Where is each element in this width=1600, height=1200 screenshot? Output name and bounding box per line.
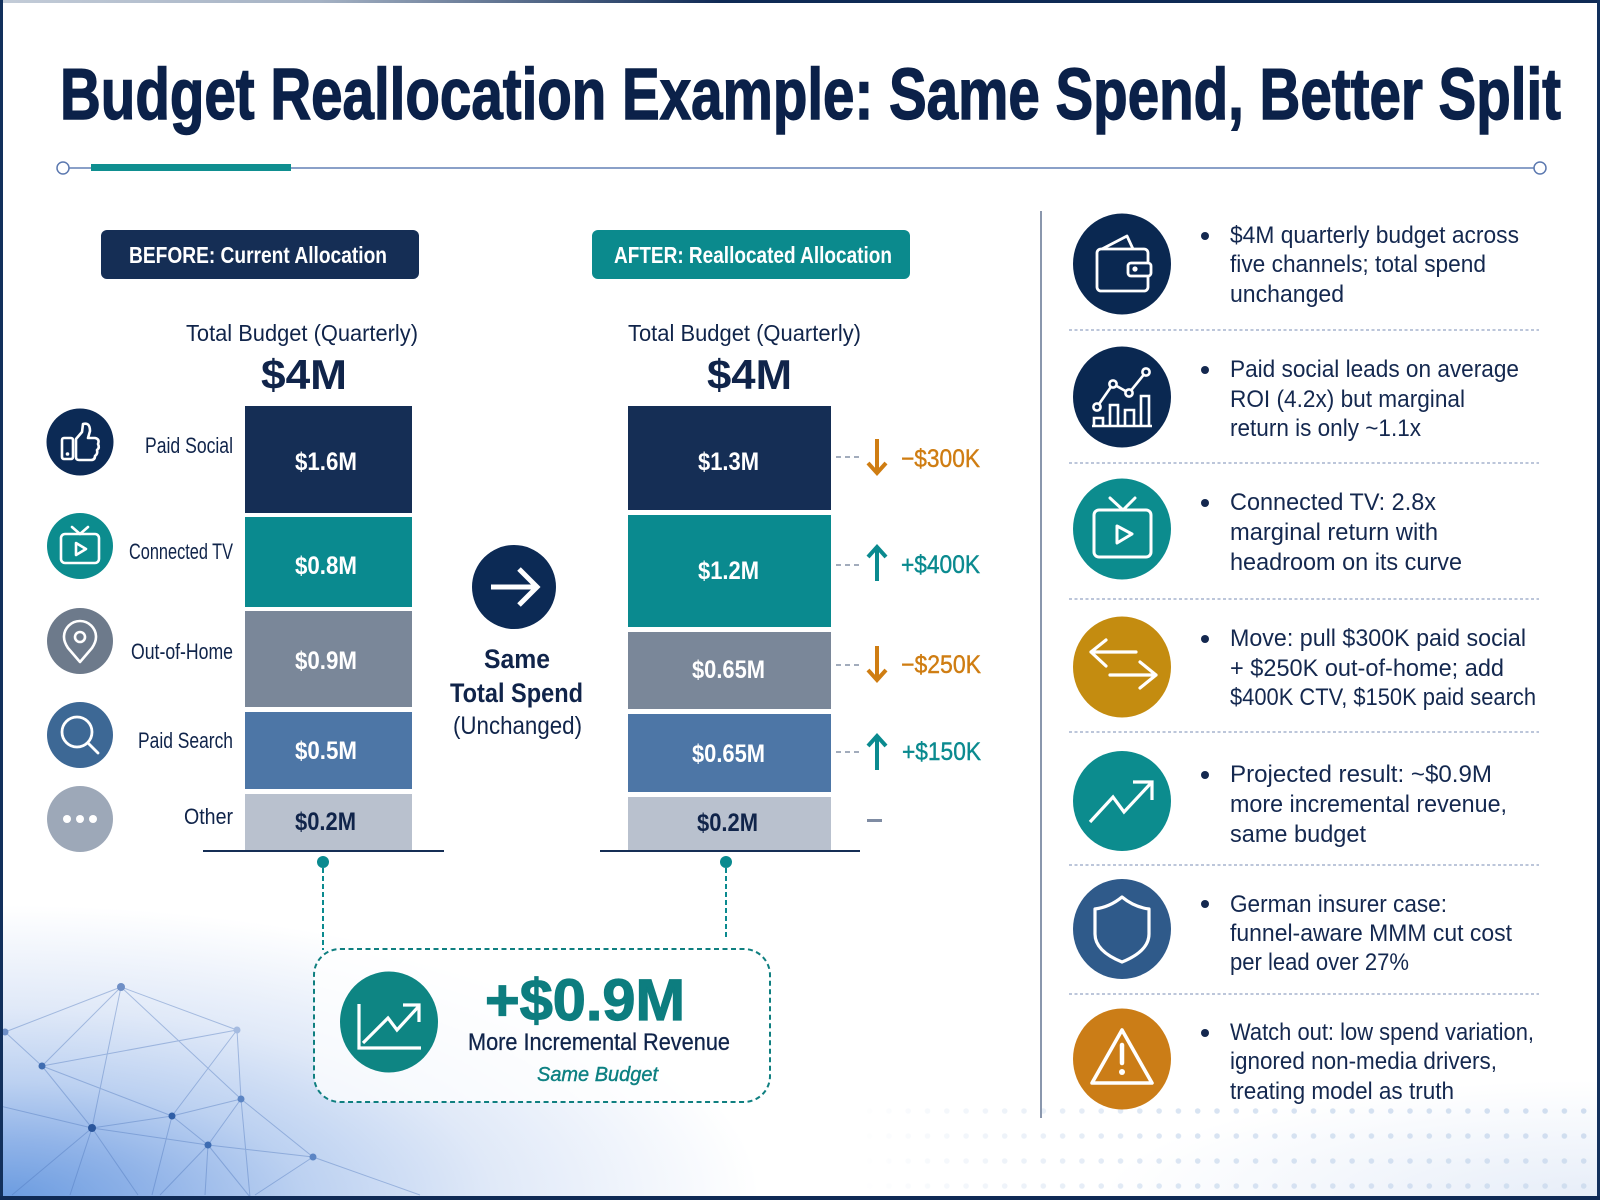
- icon: shield: [1073, 879, 1171, 979]
- after total budget: Total Budget (Quarterly): [628, 320, 861, 346]
- segment: paid social: [628, 406, 831, 510]
- segment: other: $0.2M: [295, 808, 356, 836]
- item: german insurer: funnel-aware MMM cut cost: [1230, 920, 1512, 947]
- item: paid social: ROI (4.2x) but marginal: [1230, 386, 1465, 413]
- delta: paid search: +$150K: [902, 738, 981, 766]
- item: connected tv: [1073, 478, 1462, 580]
- text: same total spend: Total Spend: [450, 678, 583, 708]
- segment: connected tv: $0.8M: [295, 552, 357, 580]
- segment: connected tv: [628, 515, 831, 627]
- label: other: Other: [184, 804, 233, 829]
- segment: out-of-home: [628, 632, 831, 709]
- sublabel: Same Budget: [537, 1064, 659, 1086]
- segment: other: [628, 797, 831, 850]
- label: out-of-home: Out-of-Home: [131, 639, 233, 664]
- delta: out-of-home: −$250K: [901, 651, 981, 679]
- after heading pill: [592, 230, 910, 279]
- icon: tv: [1073, 478, 1171, 580]
- icon: connected tv: [47, 513, 113, 579]
- takeaways panel: [1073, 214, 1536, 1110]
- item: watch out: ignored non-media drivers,: [1230, 1048, 1497, 1075]
- delta: paid social: −$300K: [901, 445, 980, 473]
- title rule: [57, 162, 1546, 174]
- segment: other: $0.2M: [697, 809, 758, 837]
- segment: paid social: $1.6M: [295, 448, 357, 476]
- icon: out-of-home pin: [47, 608, 113, 674]
- segment: out-of-home: $0.65M: [692, 656, 765, 684]
- item: projected result: more incremental revenue,: [1230, 791, 1507, 818]
- item: budget: [1073, 214, 1519, 314]
- icon: swap arrows: [1073, 616, 1171, 718]
- item: german insurer: [1073, 879, 1512, 979]
- vertical divider: [1040, 211, 1042, 1118]
- delta: paid social: [836, 439, 980, 473]
- label: More Incremental Revenue: [468, 1029, 730, 1056]
- after heading pill: AFTER: Reallocated Allocation: [614, 242, 892, 268]
- item: move: + $250K out-of-home; add: [1230, 655, 1504, 682]
- text: same total spend: Same: [484, 644, 550, 674]
- channel legend: [46, 408, 233, 852]
- before total budget: $4M: [261, 351, 347, 398]
- item: budget: $4M quarterly budget across: [1230, 222, 1519, 249]
- segment: out-of-home: $0.9M: [295, 647, 357, 675]
- before heading pill: BEFORE: Current Allocation: [129, 242, 387, 268]
- label: connected tv: Connected TV: [129, 539, 233, 564]
- icon: growth chart: [340, 972, 438, 1072]
- segment: paid social: $1.3M: [698, 448, 759, 476]
- segment: paid search: $0.65M: [692, 740, 765, 768]
- item: move: [1073, 616, 1536, 718]
- after total budget: $4M: [707, 351, 792, 398]
- item: german insurer: German insurer case:: [1230, 891, 1447, 918]
- text: same total spend: [450, 644, 583, 740]
- delta: connected tv: +$400K: [901, 551, 980, 579]
- before total budget: [186, 320, 418, 398]
- label: paid social: Paid Social: [145, 433, 233, 458]
- icon: arrow: [472, 545, 556, 629]
- item: watch out: Watch out: low spend variation,: [1230, 1019, 1534, 1046]
- segment: paid social: [245, 406, 412, 513]
- icon: warning: [1073, 1008, 1171, 1110]
- page background: [3, 932, 1597, 1196]
- change annotations: [836, 439, 981, 822]
- item: connected tv: marginal return with: [1230, 519, 1438, 546]
- icon: other: [47, 786, 113, 852]
- segment: paid search: [628, 714, 831, 792]
- item: german insurer: per lead over 27%: [1230, 949, 1409, 976]
- segment: connected tv: $1.2M: [698, 557, 759, 585]
- item: projected result: same budget: [1230, 821, 1366, 848]
- right dividers: [1069, 330, 1539, 994]
- icon: trend arrow: [1073, 751, 1171, 851]
- segment: paid search: [245, 712, 412, 789]
- value: +$0.9M: [485, 968, 685, 1033]
- segment: paid search: $0.5M: [295, 737, 357, 765]
- item: budget: five channels; total spend: [1230, 251, 1486, 278]
- before stacked bar: [203, 406, 444, 851]
- item: budget: unchanged: [1230, 281, 1344, 308]
- icon: paid search: [47, 702, 113, 768]
- decorative network: [0, 983, 420, 1197]
- item: paid social: return is only ~1.1x: [1230, 415, 1421, 442]
- item: watch out: treating model as truth: [1230, 1078, 1454, 1105]
- segment: other: [245, 794, 412, 850]
- after total budget: [628, 320, 861, 398]
- delta: paid search: [836, 736, 981, 770]
- label: paid search: Paid Search: [138, 728, 233, 753]
- item: move: Move: pull $300K paid social: [1230, 625, 1526, 652]
- item: projected result: Projected result: ~$0.9M: [1230, 761, 1492, 788]
- item: connected tv: headroom on its curve: [1230, 549, 1462, 576]
- before heading pill: [101, 230, 419, 279]
- connector dots: [317, 856, 732, 950]
- icon: paid social thumbs up: [46, 408, 114, 476]
- delta: other unchanged: [867, 819, 882, 822]
- centre transition: [450, 545, 583, 740]
- item: watch out: [1073, 1008, 1534, 1110]
- segment: out-of-home: [245, 611, 412, 707]
- icon: wallet: [1073, 214, 1171, 314]
- item: paid social: [1073, 346, 1519, 448]
- delta: connected tv: [836, 547, 980, 581]
- item: connected tv: Connected TV: 2.8x: [1230, 489, 1436, 516]
- delta: out-of-home: [836, 646, 981, 680]
- after stacked bar: [600, 406, 860, 851]
- item: projected result: [1073, 751, 1507, 851]
- text: same total spend: (Unchanged): [453, 712, 582, 740]
- before total budget: Total Budget (Quarterly): [186, 320, 418, 346]
- item: move: $400K CTV, $150K paid search: [1230, 684, 1536, 711]
- callout: incremental revenue: [314, 949, 770, 1102]
- item: paid social: Paid social leads on average: [1230, 356, 1519, 383]
- icon: line and bar chart: [1073, 346, 1171, 448]
- segment: connected tv: [245, 517, 412, 607]
